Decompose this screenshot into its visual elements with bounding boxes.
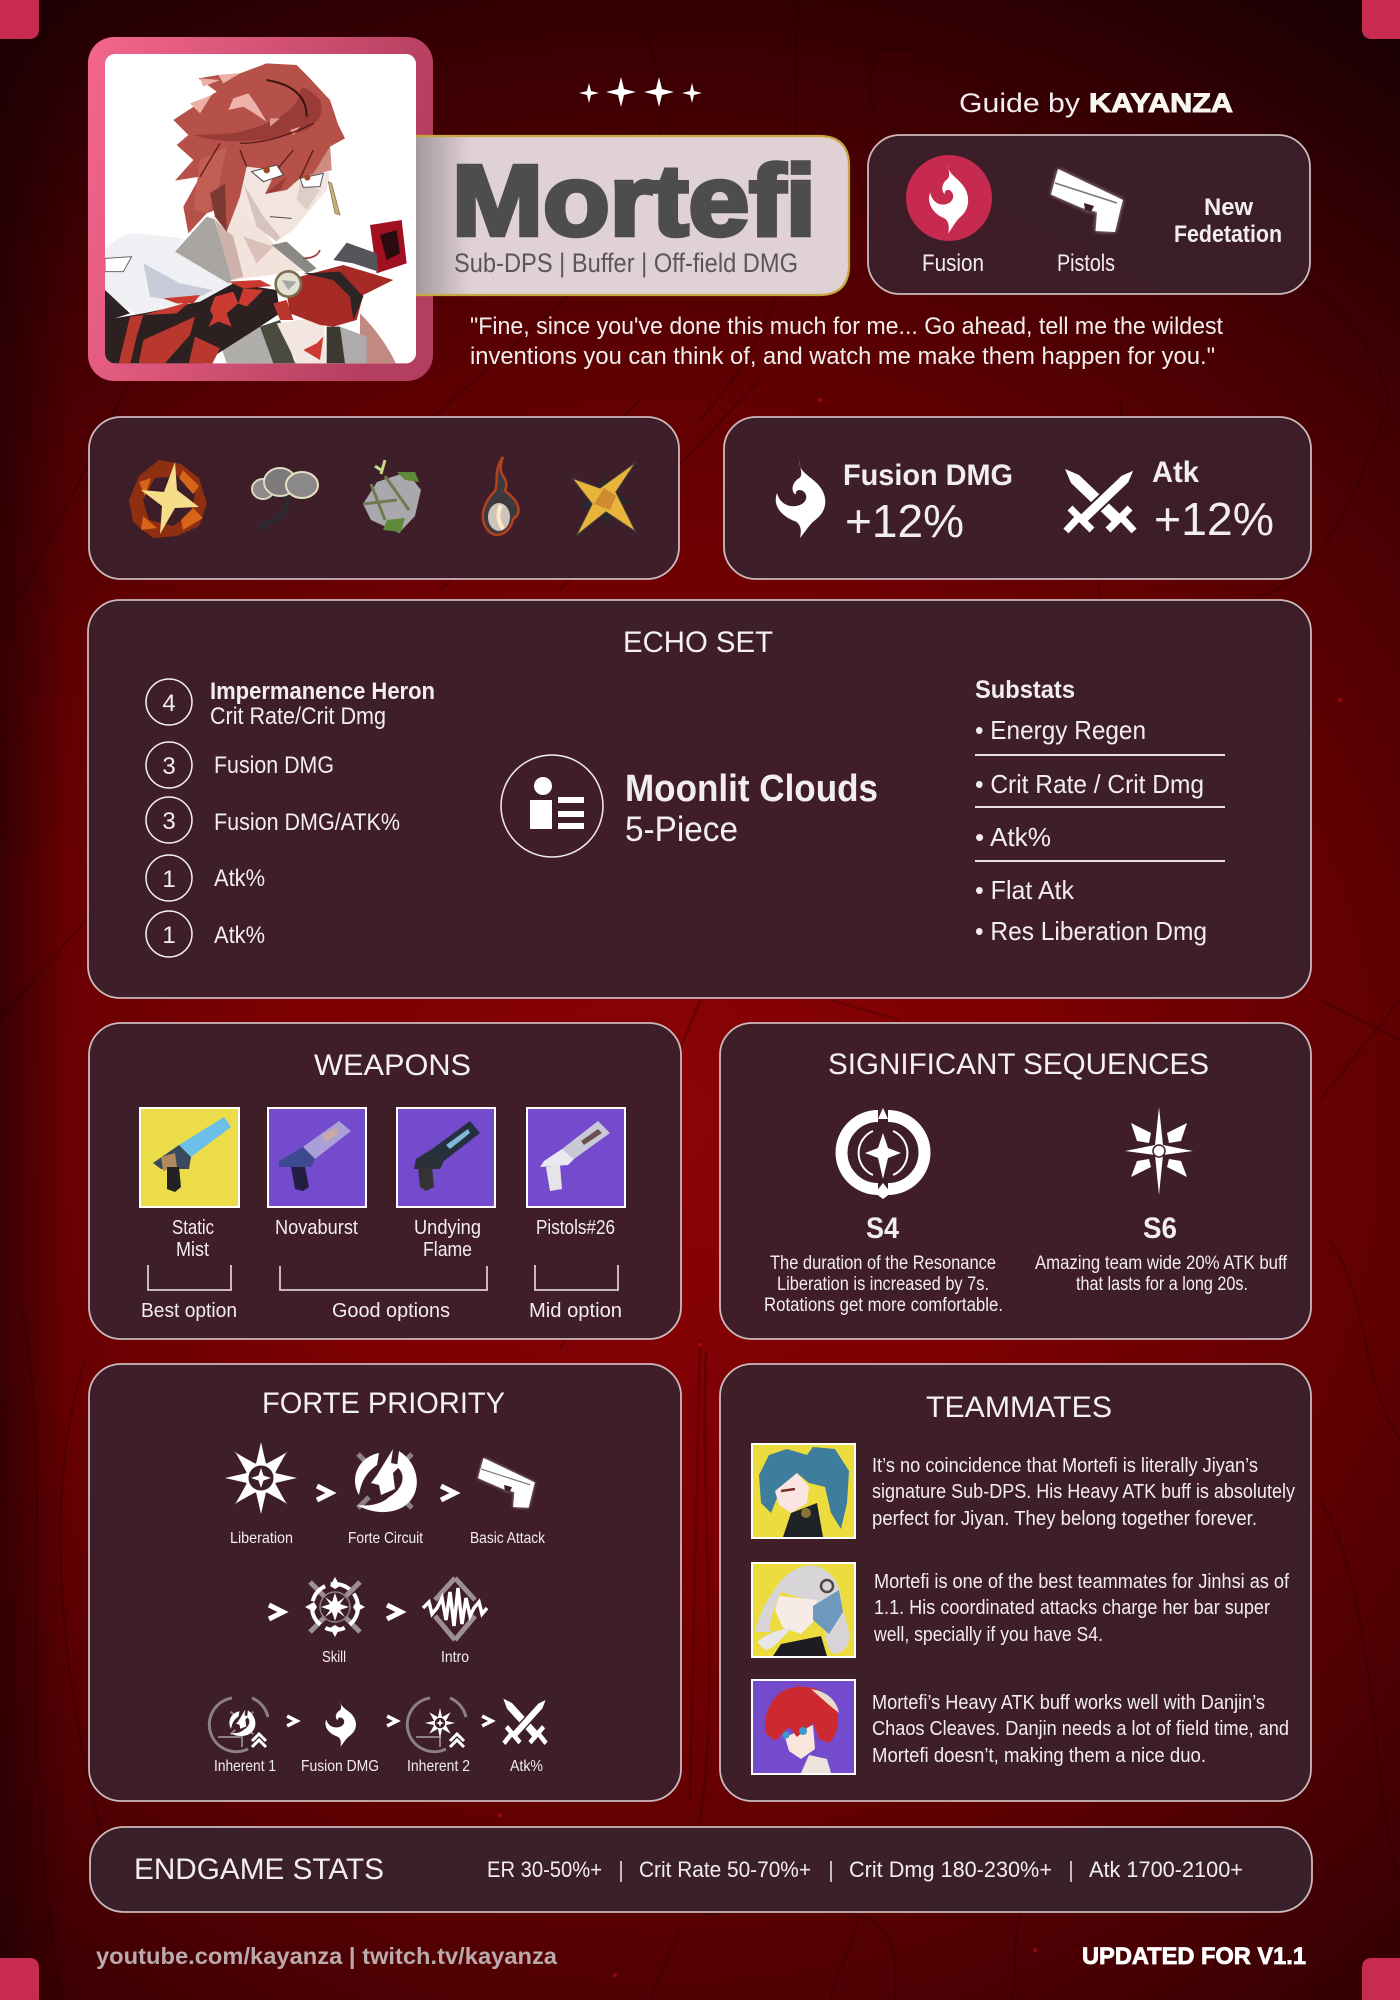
character name: Mortefi [452,145,816,257]
icon: inherent 1 [209,1698,268,1752]
region [1174,194,1282,248]
corner tab top-left [0,0,39,39]
rating labels: Good options [332,1300,450,1322]
first row labels: Liberation [230,1530,293,1547]
echo cost list: Fusion DMG [214,752,334,779]
weapon names: Undying [414,1217,481,1239]
quote: "Fine, since you've done this much for me... Go ahead, tell me the wildest [470,313,1223,340]
teammate text: Jinhsi: 1.1. His coordinated attacks charge her bar super [874,1597,1270,1619]
teammate text: Jiyan [872,1455,1295,1530]
heading: ECHO SET [623,626,773,659]
stat values [487,1857,1243,1882]
teammate text: Jiyan: perfect for Jiyan. They belong together forever. [872,1508,1257,1530]
heading: SIGNIFICANT SEQUENCES [828,1048,1209,1081]
teammate text: Danjin [872,1692,1289,1767]
third row labels [214,1758,543,1775]
substats: • Res Liberation Dmg [975,916,1207,946]
echo cost list [146,678,435,957]
icon: intro [423,1578,487,1640]
panel: teammates [720,1364,1311,1801]
echo set name: Moonlit Clouds [625,768,878,810]
stat: fusion damage: +12% [845,495,964,547]
S6 text [1035,1212,1288,1295]
icon: mushroom material [252,468,318,530]
second row labels [322,1649,469,1666]
teammate text: Jiyan: signature Sub-DPS. His Heavy ATK buff is absolutely [872,1481,1295,1503]
icon: mossy stone material [363,460,421,533]
teammate text: Danjin: Mortefi’s Heavy ATK buff works well with Danjin’s [872,1692,1265,1714]
stat: attack: Atk [1152,456,1199,489]
teammate text: Jinhsi: Mortefi is one of the best teammates for Jinhsi as of [874,1571,1289,1593]
teammate text: Jinhsi [873,1571,1289,1646]
S4 text: Rotations get more comfortable. [764,1295,1003,1316]
rating labels: Mid option [529,1300,622,1322]
icon: liberation [225,1442,297,1514]
echo cost list: 1 [162,922,176,949]
echo cost list: 3 [162,808,176,835]
weapon names [172,1217,615,1261]
arrow [387,1605,401,1619]
teammate text: Danjin: Mortefi doesn’t, making them a nice duo. [872,1745,1206,1767]
region: New [1204,194,1253,221]
echo cost list: 4 [162,690,176,717]
echo cost list: Crit Rate/Crit Dmg [210,703,386,730]
rating labels: Best option [141,1300,237,1322]
icon: pistol [1051,169,1123,232]
echo cost list: Fusion DMG/ATK% [214,809,400,836]
echo cost list: 1 [162,866,176,893]
stat values: Crit Rate 50-70%+ [639,1857,811,1882]
icon: S4 emblem [836,1108,930,1199]
weapon names: Static [172,1217,214,1239]
heading: TEAMMATES [926,1391,1112,1424]
icon: attack swords [1065,469,1135,531]
arrow [269,1605,283,1619]
arrow [482,1716,492,1726]
substats [975,676,1225,946]
teammate text: Jiyan: It’s no coincidence that Mortefi is literally Jiyan’s [872,1455,1258,1477]
footer links: youtube.com/kayanza | twitch.tv/kayanza [96,1943,557,1969]
S6 text: Amazing team wide 20% ATK buff [1035,1253,1288,1274]
panel: weapons [89,1023,681,1339]
weapon: Undying Flame [397,1108,495,1207]
third row labels: Inherent 1 [214,1758,276,1775]
first row labels: Basic Attack [470,1530,546,1547]
stat: fusion damage: Fusion DMG [843,459,1013,492]
S4 text: S4 [866,1212,899,1245]
substats: • Flat Atk [975,875,1075,905]
guide credit: KAYANZA [1089,88,1233,118]
third row labels: Inherent 2 [407,1758,470,1775]
substats: • Atk% [975,822,1051,852]
panel: forte priority [89,1364,681,1801]
roles: Sub-DPS | Buffer | Off-field DMG [454,248,798,278]
weapon names: Novaburst [275,1217,358,1239]
portrait: Jiyan [752,1444,855,1538]
arrow [287,1716,297,1726]
icon: forte circuit [355,1449,417,1512]
second row labels: Skill [322,1649,346,1666]
echo cost list: Atk% [214,922,265,949]
echo cost list: Impermanence Heron [210,678,435,705]
first row labels [230,1530,546,1547]
stat values: Crit Dmg 180-230%+ [849,1857,1052,1882]
panel: significant sequences [720,1023,1311,1339]
icon: basic attack [478,1458,535,1508]
icon: fire star material [129,460,207,538]
icon: fusion damage bonus [325,1699,356,1747]
rating brackets [148,1265,618,1290]
portrait: Danjin [752,1680,855,1774]
panel: endgame stats [90,1827,1312,1912]
substats: • Energy Regen [975,715,1146,745]
quote [470,313,1223,370]
guide credit: Guide by [959,88,1081,118]
echo set name [625,768,878,849]
weapon names: Flame [423,1239,472,1261]
icon: echo set emblem [501,755,603,857]
stat values: Atk 1700-2100+ [1089,1857,1243,1882]
teammate text: Danjin: Chaos Cleaves. Danjin needs a lot of field time, and [872,1718,1289,1740]
label: Fusion: Fusion [922,250,984,277]
rating labels [141,1300,622,1322]
stat: fusion damage [843,459,1013,547]
name banner [416,136,849,295]
character portrait frame [88,37,433,381]
arrow [387,1716,397,1726]
portrait illustration [105,54,416,365]
third row labels: Fusion DMG [301,1758,379,1775]
substats: • Crit Rate / Crit Dmg [975,769,1204,799]
icon: skill [305,1577,365,1637]
corner tab bottom-left [0,1958,39,2000]
arrow [441,1486,455,1500]
echo cost list: Atk% [214,865,265,892]
portrait: Jinhsi [752,1563,855,1657]
third row labels: Atk% [510,1758,543,1775]
footer version note: UPDATED FOR V1.1 [1082,1943,1306,1970]
S6 text: S6 [1143,1212,1177,1245]
weapon: Static Mist [140,1108,239,1207]
heading: FORTE PRIORITY [262,1387,505,1420]
quote: inventions you can think of, and watch me make them happen for you." [470,343,1215,370]
arrow [317,1486,331,1500]
corner tab bottom-right [1362,1958,1400,2000]
icon: S6 emblem [1125,1107,1193,1195]
S4 text [764,1212,1003,1316]
guide credit [959,88,1233,118]
weapon: Pistols#26 [527,1108,625,1207]
echo set name: 5-Piece [625,810,738,849]
weapon: Novaburst [268,1108,366,1207]
weapon names: Pistols#26 [536,1217,615,1239]
icon: gold star material [572,462,636,536]
panel: element, weapon, region [868,135,1310,294]
substats: Substats [975,676,1075,704]
stat: attack [1152,456,1274,545]
teammate text: Jinhsi: well, specially if you have S4. [873,1624,1103,1646]
weapon names: Mist [176,1239,209,1261]
first row labels: Forte Circuit [348,1530,423,1547]
S4 text: Liberation is increased by 7s. [777,1274,989,1295]
heading: ENDGAME STATS [134,1853,384,1886]
icon: flame orb material [483,457,519,535]
stat values: ER 30-50%+ [487,1857,602,1882]
panel: echo set [88,600,1311,998]
S6 text: that lasts for a long 20s. [1076,1274,1248,1295]
rarity stars [579,77,702,107]
S4 text: The duration of the Resonance [770,1253,996,1274]
label: Pistols: Pistols [1057,250,1115,277]
second row labels: Intro [441,1649,469,1666]
echo cost list: 3 [162,753,176,780]
icon: inherent 2 [407,1698,466,1752]
icon: fusion damage [776,460,825,538]
icon: attack bonus [503,1699,547,1743]
panel: ascension materials [89,417,679,579]
region: Fedetation [1174,221,1282,248]
panel: ascension stat bonuses [724,417,1311,579]
stat: attack: +12% [1154,493,1274,545]
icon: fusion element [906,155,992,241]
heading: WEAPONS [314,1049,471,1082]
corner tab top-right [1362,0,1400,39]
